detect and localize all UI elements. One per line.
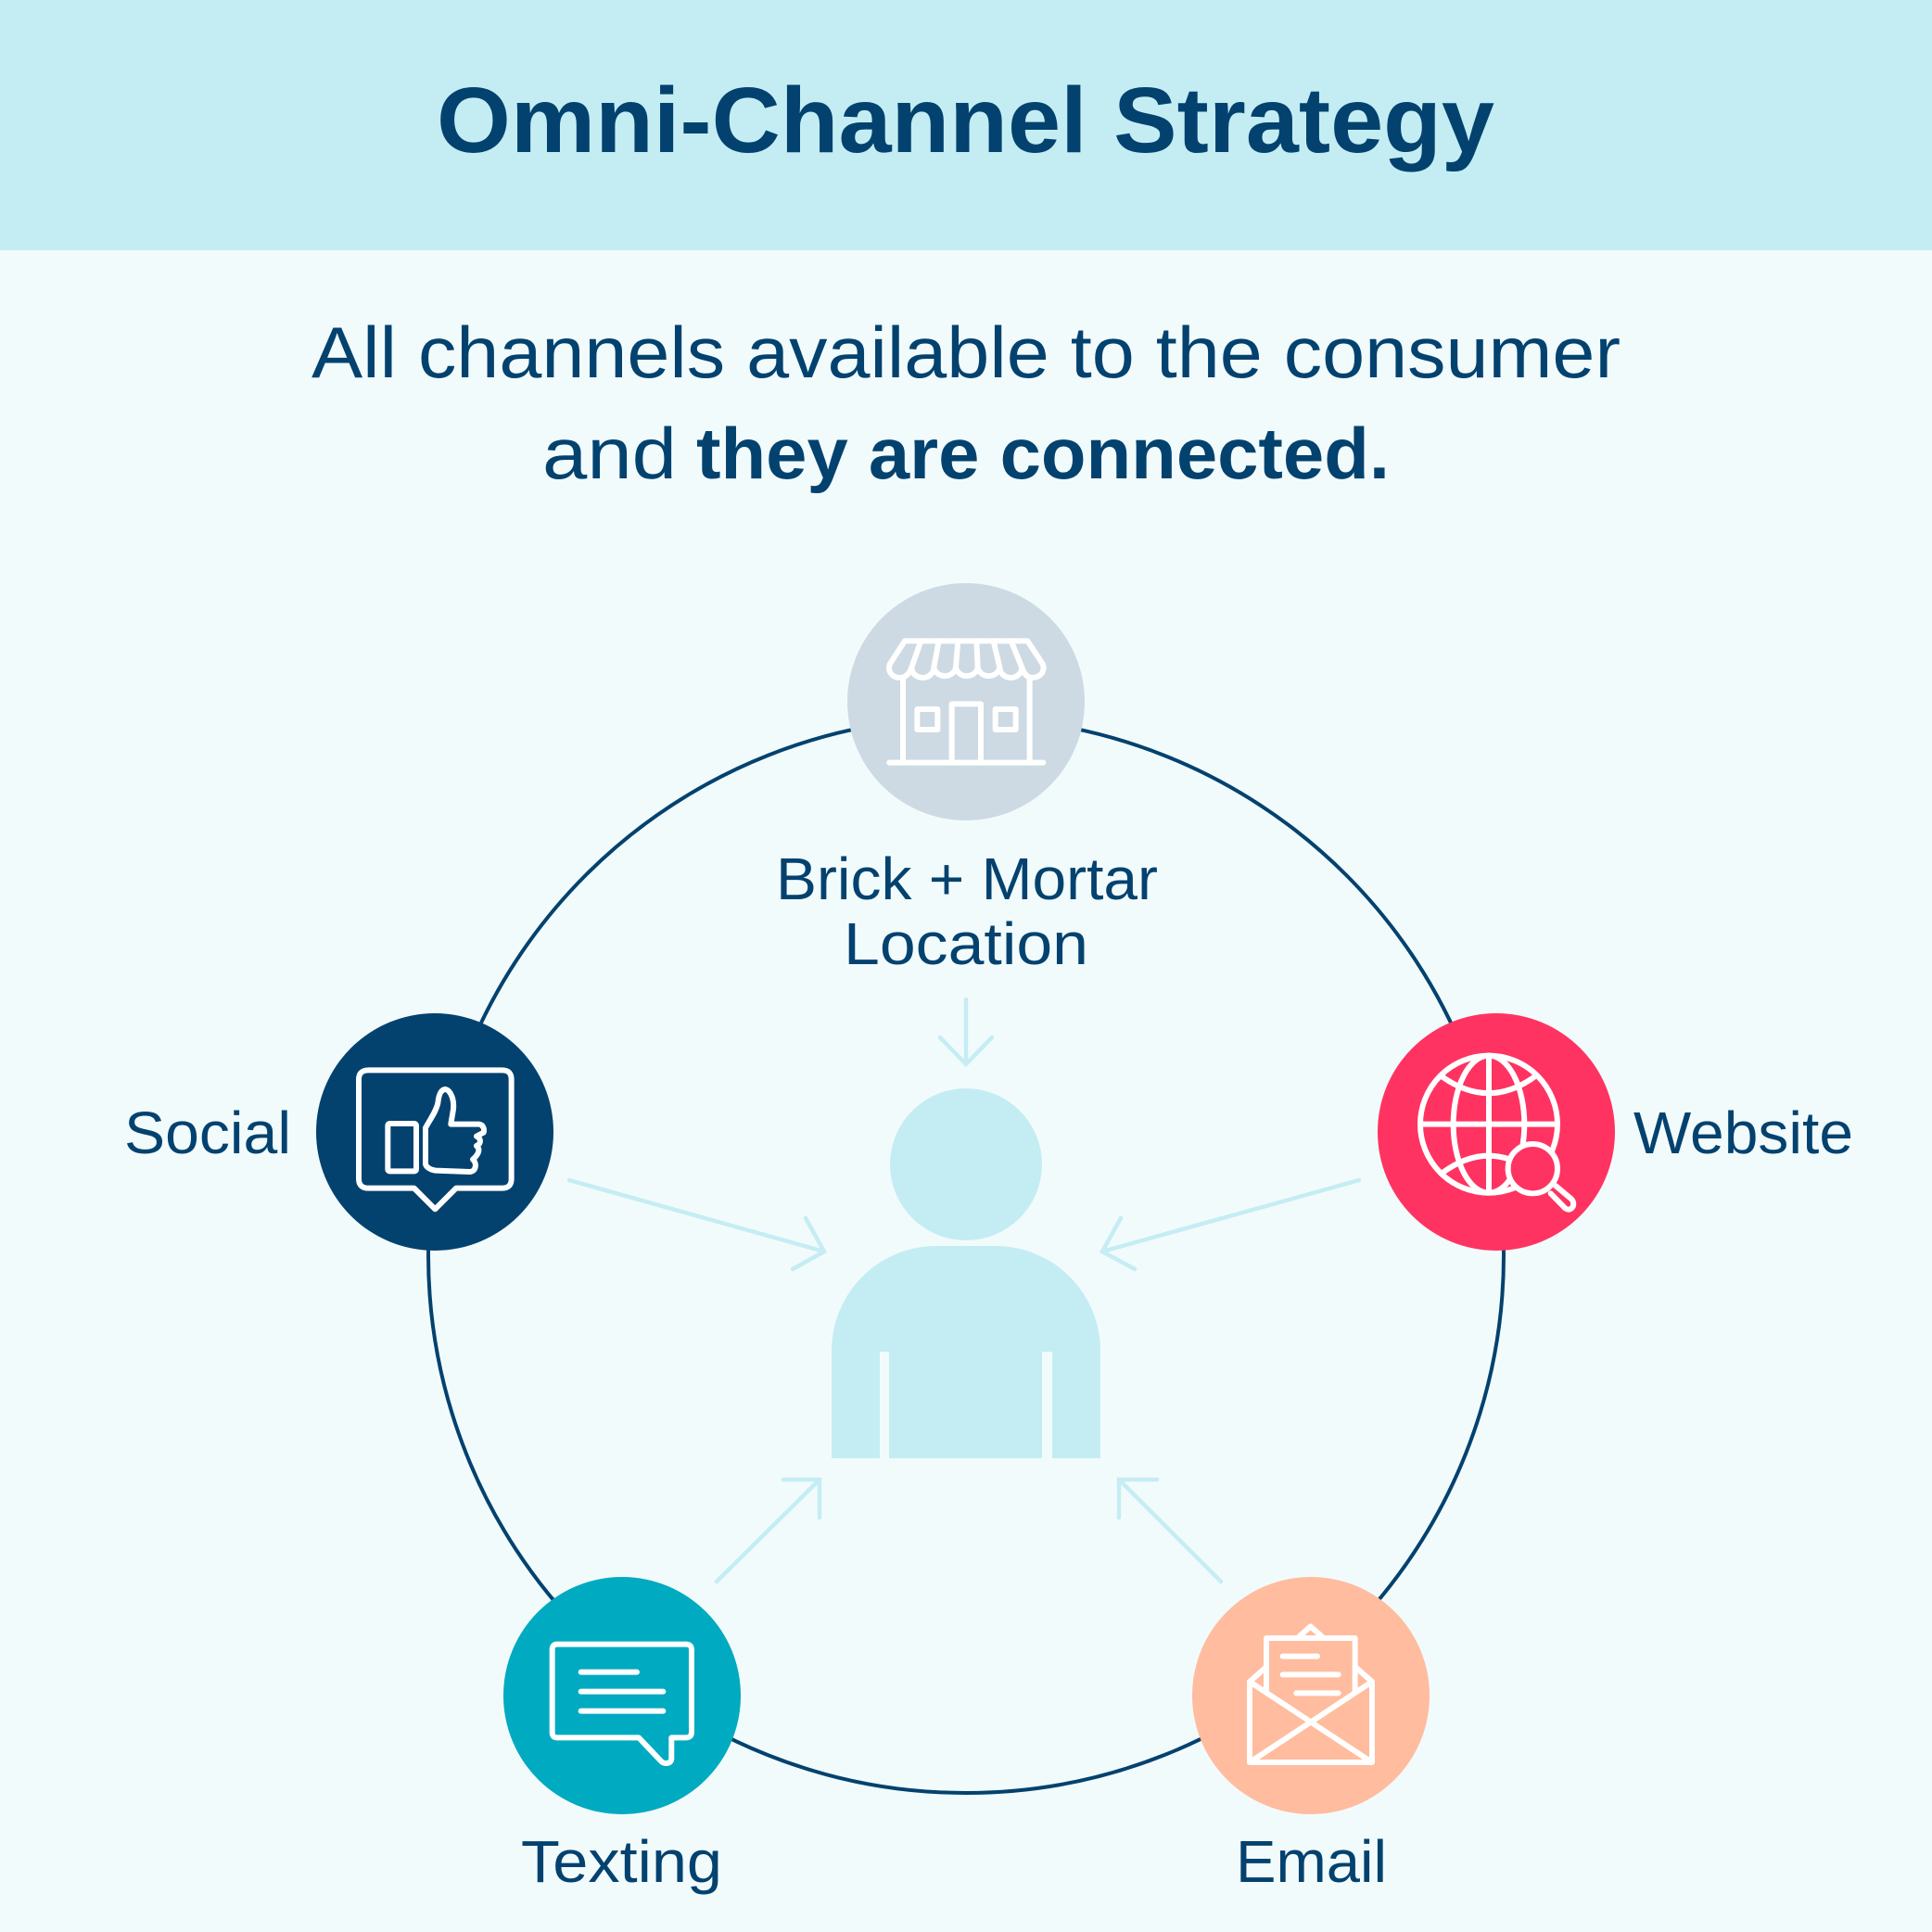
label: website: Website xyxy=(1633,1099,1853,1166)
node: brick and mortar xyxy=(847,583,1085,820)
node: social xyxy=(316,1013,553,1251)
label: brick and mortar: Brick + Mortar xyxy=(776,845,1158,912)
icon: thumbs up speech bubble xyxy=(359,1070,512,1209)
arrow: texting to person xyxy=(717,1480,820,1582)
person silhouette xyxy=(832,1088,1100,1458)
subtitle xyxy=(311,311,1621,494)
header band xyxy=(0,0,1932,250)
label: texting: Texting xyxy=(521,1828,722,1895)
node: texting xyxy=(503,1577,741,1814)
node: email xyxy=(1192,1577,1430,1814)
connecting ring xyxy=(428,718,1504,1793)
node: website xyxy=(1378,1013,1615,1251)
arrow: website to person xyxy=(1102,1180,1359,1269)
icon: chat bubble xyxy=(553,1645,692,1763)
label: brick and mortar xyxy=(776,845,1158,977)
icon: open envelope xyxy=(1250,1626,1372,1762)
label: brick and mortar: Location xyxy=(844,910,1088,977)
subtitle: All channels available to the consumer xyxy=(311,311,1621,393)
subtitle: they are connected. xyxy=(696,413,1390,494)
subtitle: and xyxy=(542,413,677,494)
icon: globe with magnifier xyxy=(1420,1056,1573,1210)
arrow: email to person xyxy=(1119,1480,1221,1582)
label: email: Email xyxy=(1236,1828,1387,1895)
icon: storefront xyxy=(889,641,1044,763)
label: social: Social xyxy=(124,1099,291,1166)
arrow: social to person xyxy=(569,1180,824,1269)
arrow: brick and mortar to person xyxy=(940,999,992,1064)
title: Omni-Channel Strategy xyxy=(437,69,1494,172)
